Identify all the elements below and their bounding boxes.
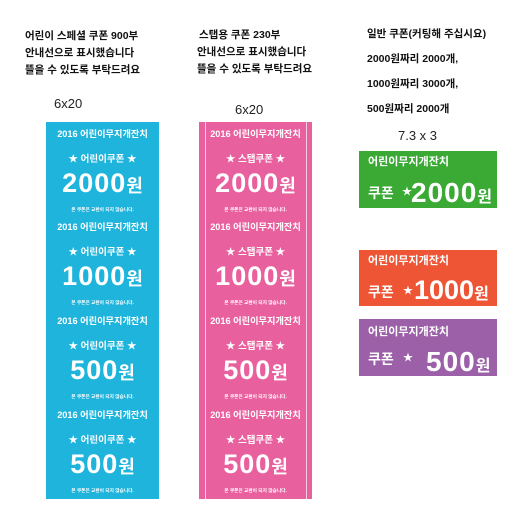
coupon: blue 500 (57, 316, 148, 399)
coupon: purple 500 (359, 319, 497, 376)
label: blue size: 6x20 (54, 96, 82, 111)
coupon: blue 1000: 1000원 (62, 261, 143, 291)
coupon: blue 500 second: ★ 어린이쿠폰 ★ (68, 435, 136, 446)
text: staff coupon note: 스탭용 쿠폰 230부 (199, 29, 280, 41)
coupon: blue 1000: 본 쿠폰은 교환이 되지 않습니다. (71, 300, 134, 304)
coupon: pink 2000: ★ 스탭쿠폰 ★ (226, 154, 285, 165)
text: general coupon note (367, 28, 486, 115)
text: children's coupon note (25, 30, 140, 76)
coupon: purple 500: 어린이무지개잔치 (368, 326, 449, 338)
coupon: pink 500 second: 2016 어린이무지개잔치 (210, 410, 301, 420)
coupon: blue 500 second: 2016 어린이무지개잔치 (57, 410, 148, 420)
text: children's coupon note: 안내선으로 표시했습니다 (25, 47, 134, 59)
label: general size: 7.3 x 3 (398, 128, 437, 143)
panel: blue children's coupons (46, 122, 159, 499)
coupon: orange 1000: 1000원 (414, 275, 489, 305)
coupon: pink 1000 (210, 222, 301, 305)
coupon: orange 1000: 어린이무지개잔치 (368, 255, 449, 267)
coupon: blue 500: 본 쿠폰은 교환이 되지 않습니다. (71, 394, 134, 398)
coupon: pink 1000: 본 쿠폰은 교환이 되지 않습니다. (224, 300, 287, 304)
coupon: blue 2000: 2000원 (62, 168, 143, 198)
coupon: pink 500 second: 본 쿠폰은 교환이 되지 않습니다. (224, 488, 287, 492)
coupon: pink 1000: 1000원 (215, 261, 296, 291)
panel: pink staff coupons (199, 122, 312, 499)
coupon: pink 2000: 2000원 (215, 168, 296, 198)
coupon: pink 1000: ★ 스탭쿠폰 ★ (226, 247, 285, 258)
coupon: green 2000: 2000원 (411, 177, 492, 208)
text: children's coupon note: 뜰을 수 있도록 부탁드려요 (25, 64, 140, 76)
coupon: blue 500 second (57, 410, 148, 493)
text: staff coupon note: 뜰을 수 있도록 부탁드려요 (197, 63, 312, 75)
coupon: blue 2000: 2016 어린이무지개잔치 (57, 129, 148, 139)
coupon: green 2000: 어린이무지개잔치 (368, 156, 449, 168)
text: staff coupon note: 안내선으로 표시했습니다 (197, 46, 306, 58)
coupon: blue 1000: 2016 어린이무지개잔치 (57, 222, 148, 232)
coupon: pink 2000 (210, 129, 301, 212)
coupon: green 2000: 쿠폰 (368, 185, 394, 201)
coupon: blue 500 second: 500원 (70, 449, 135, 479)
coupon: pink 2000: 본 쿠폰은 교환이 되지 않습니다. (224, 206, 287, 212)
label: pink size: 6x20 (235, 102, 263, 117)
coupon: pink 500 second: ★ 스탭쿠폰 ★ (226, 435, 285, 446)
coupon: blue 2000: 본 쿠폰은 교환이 되지 않습니다. (71, 206, 134, 212)
coupon: green 2000 (359, 151, 497, 208)
coupon: blue 500: 2016 어린이무지개잔치 (57, 316, 148, 326)
coupon: pink 500: 500원 (223, 355, 288, 385)
coupon: orange 1000: ★ (403, 286, 413, 297)
coupon: blue 2000 (57, 129, 148, 212)
text: general coupon note: 일반 쿠폰(커팅해 주십시요) (367, 28, 486, 40)
coupon: purple 500: 500원 (426, 346, 490, 377)
coupon: pink 500 second: 500원 (223, 449, 288, 479)
coupon: blue 2000: ★ 어린이쿠폰 ★ (68, 154, 136, 165)
coupon: blue 500: 500원 (70, 355, 135, 385)
coupon: pink 500 second (210, 410, 301, 493)
coupon: green 2000: ★ (402, 187, 412, 198)
text: staff coupon note (197, 29, 312, 75)
text: general coupon note: 2000원짜리 2000개, (367, 53, 458, 65)
text: general coupon note: 1000원짜리 3000개, (367, 78, 458, 90)
coupon: purple 500: 쿠폰 (368, 351, 394, 367)
coupon: blue 500: ★ 어린이쿠폰 ★ (68, 341, 136, 352)
coupon: blue 1000: ★ 어린이쿠폰 ★ (68, 247, 136, 258)
coupon: orange 1000 (359, 250, 497, 306)
coupon: orange 1000: 쿠폰 (368, 284, 394, 300)
coupon: pink 500 (210, 316, 301, 399)
coupon: pink 1000: 2016 어린이무지개잔치 (210, 222, 301, 232)
coupon: pink 2000: 2016 어린이무지개잔치 (210, 129, 301, 139)
coupon: pink 500: ★ 스탭쿠폰 ★ (226, 341, 285, 352)
coupon: purple 500: ★ (403, 353, 413, 364)
coupon: blue 500 second: 본 쿠폰은 교환이 되지 않습니다. (71, 488, 134, 492)
coupon: pink 500: 2016 어린이무지개잔치 (210, 316, 301, 326)
coupon: pink 500: 본 쿠폰은 교환이 되지 않습니다. (224, 394, 287, 398)
text: children's coupon note: 어린이 스페셜 쿠폰 900부 (25, 30, 138, 42)
coupon: blue 1000 (57, 222, 148, 305)
text: general coupon note: 500원짜리 2000개 (367, 103, 449, 115)
